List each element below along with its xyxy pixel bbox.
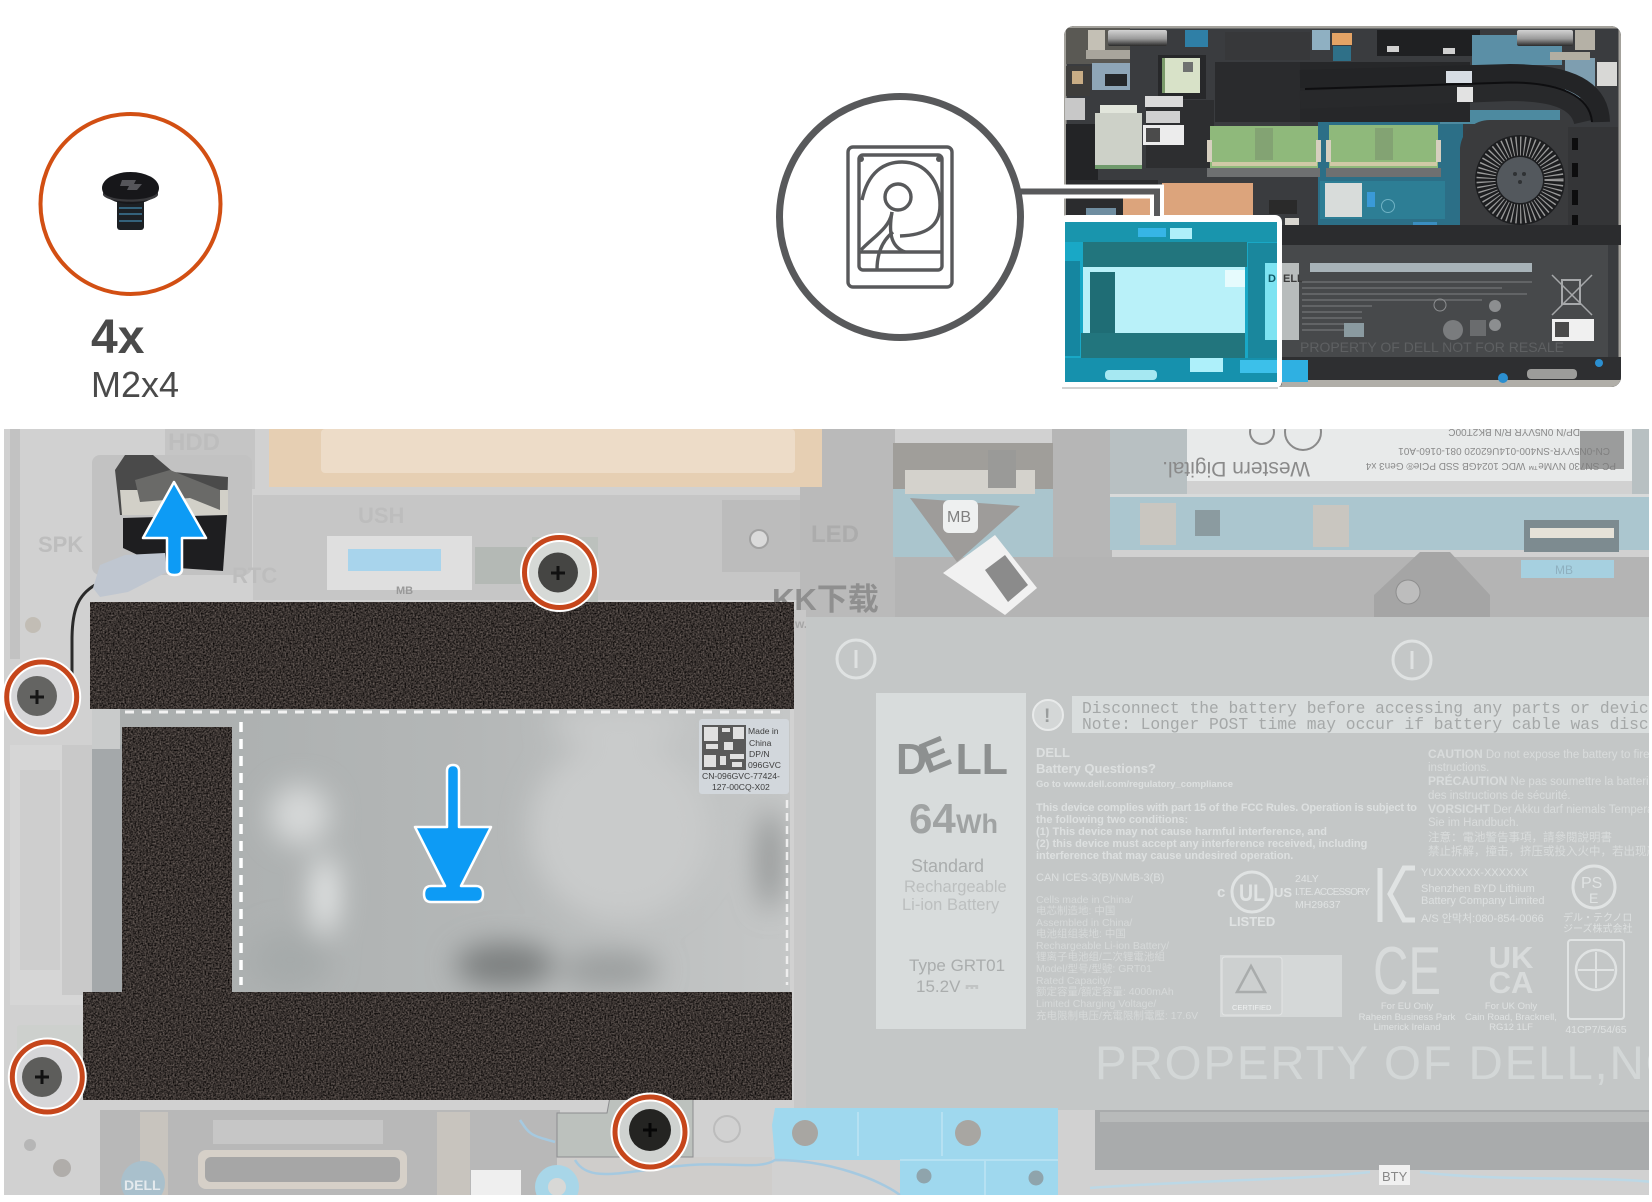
PSE mark: PS	[1581, 875, 1602, 892]
battery, faded: 电芯制造地: 中国	[1036, 904, 1115, 917]
warning icon: !	[1044, 706, 1050, 727]
screw 1	[524, 538, 594, 608]
board silk labels: USH	[358, 503, 404, 528]
foam bottom	[83, 992, 792, 1100]
battery, faded: Rated Capacity/	[1036, 975, 1111, 987]
lower right strip: BTY	[1382, 1169, 1408, 1184]
laptop base interior	[1064, 26, 1622, 387]
part label: Made in	[748, 726, 779, 736]
blue bracket	[714, 1108, 1058, 1195]
KC mark: Shenzhen BYD Lithium	[1421, 883, 1535, 895]
board silk labels: LED	[811, 521, 859, 548]
regulatory text: Go to www.dell.com/regulatory_compliance	[1036, 779, 1233, 790]
drive cable	[72, 455, 228, 680]
PSE mark: E	[1589, 890, 1598, 906]
battery, faded: Limited Charging Voltage/	[1036, 998, 1156, 1010]
regulatory text: Battery Questions?	[1036, 761, 1156, 776]
battery, faded: Cells made in China/	[1036, 894, 1133, 906]
battery: PROPERTY OF DELL NOT FOR RESALE	[1300, 339, 1564, 355]
regulatory text	[1036, 745, 1417, 884]
board silk labels	[38, 508, 858, 583]
lower left speaker area: DELL	[124, 1177, 161, 1193]
upside-down SSD label: CN-0N5VYR-SN400-014U62020 081-0160-A01	[1398, 445, 1610, 456]
part label: CN-096GVC-77424-	[702, 771, 780, 781]
PSE mark: ジーズ株式会社	[1563, 922, 1632, 935]
UL mark: LISTED	[1229, 914, 1275, 929]
watermark: w.kkx.net	[794, 617, 849, 631]
foam top	[90, 602, 794, 709]
battery, faded: Type GRT01	[909, 956, 1005, 975]
regulatory text: CAN ICES-3(B)/NMB-3(B)	[1036, 872, 1164, 884]
regulatory text: This device complies with part 15 of the FCC Rules. Operation is subject to	[1036, 802, 1417, 814]
foam left	[122, 727, 232, 993]
CE mark: CE	[1373, 933, 1441, 1009]
teal main board	[1318, 122, 1463, 225]
battery, faded: instructions.	[1428, 762, 1489, 774]
fan housing	[1460, 120, 1578, 225]
left hinge and boards	[1065, 28, 1208, 182]
upside-down SSD label: Western Digital.	[1162, 457, 1310, 480]
warning icon	[1033, 700, 1063, 730]
arrow: up, cable	[143, 482, 206, 575]
battery, faded: Rechargeable Li-ion Battery/	[1036, 940, 1169, 952]
battery, faded: Sie im Handbuch.	[1428, 817, 1519, 829]
part label	[699, 719, 789, 794]
UKCA mark: Cain Road, Bracknell,	[1465, 1012, 1557, 1023]
screw 3	[12, 1042, 82, 1112]
upside-down SSD label	[1110, 429, 1649, 550]
copper shield	[1162, 183, 1253, 215]
copper shield, faded	[269, 429, 822, 487]
screw 4	[615, 1097, 685, 1167]
PSE mark: デル・テクノロ	[1563, 911, 1632, 924]
regulatory text: (1) This device may not cause harmful interference, and	[1036, 826, 1327, 838]
board silk labels: HDD	[168, 429, 220, 456]
memory modules	[1207, 125, 1441, 177]
UKCA mark: For UK Only	[1485, 1001, 1537, 1012]
regulatory text: DELL	[1036, 745, 1070, 760]
part label: China	[749, 738, 772, 748]
battery, faded: des instructions de sécurité.	[1428, 790, 1571, 802]
arrow: down, place drive	[415, 765, 491, 902]
grey battery label	[876, 693, 1026, 1029]
hard drive with foam and foil	[83, 602, 794, 1100]
flat cable, upper middle: MB	[396, 585, 413, 597]
battery: ELL	[1283, 273, 1304, 285]
regulatory text: (2) this device must accept any interference received, including	[1036, 838, 1367, 850]
KC mark: A/S 안막처:080-854-0066	[1421, 912, 1544, 925]
faded background	[4, 429, 1652, 1195]
battery hook and connector: MB	[1555, 563, 1573, 577]
M.2 slot	[1269, 181, 1445, 225]
screw callout: 4x M2x4	[40, 114, 220, 405]
part label: DP/N	[749, 749, 770, 759]
CE mark: Raheen Business Park	[1359, 1012, 1456, 1023]
part label: 127-00CQ-X02	[712, 782, 770, 792]
PSE mark	[1563, 866, 1632, 935]
wireless and cellular cards	[1095, 55, 1214, 169]
certification box, right	[1565, 940, 1627, 1036]
warning band	[1072, 696, 1652, 733]
certification box, right: 41CP7/54/65	[1565, 1024, 1627, 1036]
UL mark	[1217, 872, 1370, 929]
icon: hard drive in circle	[780, 96, 1020, 338]
CE mark	[1360, 946, 1455, 1030]
UL mark: 24LY	[1295, 873, 1319, 885]
CE mark: Limerick Ireland	[1373, 1022, 1441, 1033]
UL mark: MH29637	[1295, 899, 1341, 911]
battery, faded: 15.2V ⎓	[916, 977, 979, 996]
KC mark	[1380, 867, 1544, 925]
screw quantity: 4x	[91, 311, 145, 364]
CE mark: For EU Only	[1381, 1001, 1433, 1012]
battery, faded: 电池组组装地: 中国	[1036, 927, 1126, 940]
battery, faded: 锂离子电池组/二次锂電池組	[1036, 950, 1165, 963]
battery, faded: Wh	[956, 809, 998, 839]
icon: orange ring with screw	[40, 114, 220, 294]
regulatory text: interference that may cause undesired operation.	[1036, 850, 1293, 862]
upside-down SSD label: DP/N 0N5VYR R/N BK2T00C	[1448, 426, 1580, 437]
board with MB ribbon and sticker: MB	[947, 509, 971, 526]
upside-down SSD label: PC SN730 NVMe™ WDC 1024GB SSD PCIe® Gen3 x4	[1365, 460, 1616, 471]
battery, faded: 注意：電池警告事項，請參閱說明書	[1428, 830, 1612, 844]
battery, faded: 充电限制电压/充電限制電壓: 17.6V	[1036, 1009, 1198, 1022]
UL mark: UL	[1239, 880, 1265, 907]
battery, faded: 额定容量/額定容量: 4000mAh	[1036, 985, 1174, 998]
lower speaker strip	[1282, 357, 1622, 387]
part label: 096GVC	[748, 760, 781, 770]
watermark: KK下载	[772, 582, 879, 617]
UKCA mark: RG12 1LF	[1489, 1022, 1533, 1033]
hard drive locator: laptop overview	[780, 26, 1622, 388]
battery, faded: Disconnect the battery before accessing any parts or device.	[1082, 699, 1652, 718]
UKCA mark: UK	[1489, 940, 1534, 975]
KC mark: Battery Company Limited	[1421, 895, 1544, 907]
heat pipes	[1300, 71, 1601, 122]
battery, faded: 64	[909, 795, 956, 842]
top boards	[1312, 30, 1617, 98]
highlighted hard drive region: D	[1268, 273, 1276, 285]
battery, faded: Assembled in China/	[1036, 917, 1132, 929]
battery screw marks	[837, 640, 1431, 679]
brackets under screws	[17, 537, 693, 1157]
connector line	[1020, 192, 1157, 216]
metal foil	[92, 705, 790, 993]
battery, faded: PRÉCAUTION Ne pas soumettre la batterie	[1428, 773, 1652, 788]
battery, faded: Li-ion Battery	[902, 896, 1000, 914]
UL mark: US	[1274, 885, 1292, 900]
battery, faded	[806, 617, 1652, 1110]
UKCA mark	[1466, 947, 1556, 1030]
board silk labels: RTC	[232, 563, 277, 588]
certified box	[1220, 955, 1342, 1017]
UKCA mark: CA	[1489, 965, 1533, 1000]
battery, faded: Model/型号/型號: GRT01	[1036, 962, 1152, 975]
screw 2	[7, 662, 77, 732]
highlighted hard drive region	[1060, 215, 1282, 388]
KC mark: YUXXXXXX-XXXXXX	[1421, 867, 1529, 879]
battery	[1282, 225, 1622, 357]
dark shield	[1215, 62, 1300, 122]
UL mark: c	[1217, 884, 1225, 901]
lower left speaker area	[100, 1110, 900, 1202]
screw size: M2x4	[91, 364, 179, 405]
board silk labels: SPK	[38, 532, 83, 557]
certified box: CERTIFIED	[1232, 1003, 1272, 1012]
board with MB ribbon and sticker	[893, 443, 1053, 615]
battery hook and connector	[1374, 520, 1619, 617]
flat cable, upper middle	[327, 536, 472, 597]
battery, faded: Standard	[911, 856, 984, 876]
main photo: hard drive installation	[4, 414, 1652, 1202]
lower right strip	[1090, 1110, 1652, 1188]
regulatory text: the following two conditions:	[1036, 814, 1188, 826]
battery, faded: DELL	[896, 727, 1008, 784]
battery, faded: Rechargeable	[904, 878, 1007, 896]
UL mark: I.T.E. ACCESSORY	[1295, 887, 1370, 898]
